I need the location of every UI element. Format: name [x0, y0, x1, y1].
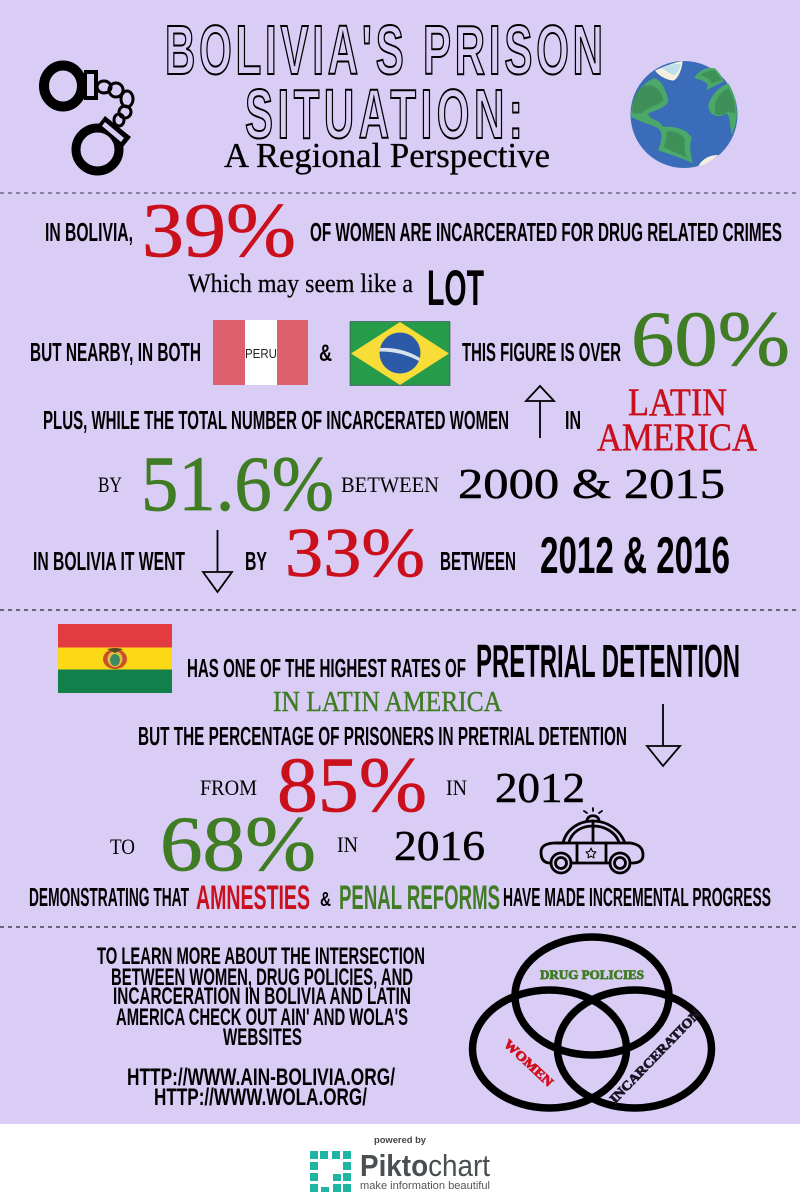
text: has one of: HAS ONE OF THE HIGHEST RATES OF — [187, 653, 466, 683]
text: 2016: 2016 — [394, 824, 485, 870]
icon: handcuffs — [44, 66, 133, 171]
arrow: up — [526, 386, 554, 438]
text: in Bolivia: IN BOLIVIA, — [45, 217, 133, 247]
text: demonstrating that: DEMONSTRATING THAT — [29, 882, 189, 912]
text block: links — [127, 1064, 395, 1111]
title: SITUATION: — [245, 76, 523, 154]
text: Latin America: AMERICA — [597, 416, 757, 459]
text block: learn more: AMERICA CHECK OUT AIN' AND WOLA'S — [116, 1004, 408, 1031]
logo: piktochart wordmark: Piktochart — [360, 1148, 490, 1183]
text: in Bolivia it went: IN BOLIVIA IT WENT — [33, 546, 185, 576]
icon: police car — [541, 808, 643, 873]
text: by: BY — [245, 546, 267, 576]
subtitle: A Regional Perspective — [224, 136, 550, 175]
number: 51.6%: 51.6% — [141, 440, 334, 527]
flag: Bolivia — [58, 624, 172, 693]
title — [165, 12, 603, 154]
text block: learn more: BETWEEN WOMEN, DRUG POLICIES, AND — [111, 964, 413, 991]
arrow: down — [203, 530, 232, 592]
text: penal reforms: PENAL REFORMS — [339, 879, 500, 917]
label: women: WOMEN — [501, 1036, 557, 1090]
text: this figure: THIS FIGURE IS OVER — [462, 337, 621, 367]
title: BOLIVIA'S PRISON — [165, 12, 603, 90]
logo: piktochart mark — [310, 1151, 351, 1192]
text: in: IN — [565, 405, 581, 435]
text: Latin America — [597, 381, 757, 459]
number: 60%: 60% — [631, 295, 790, 382]
text: which may seem: Which may seem like a — [188, 269, 413, 298]
footer text: tagline: make information beautiful — [360, 1180, 490, 1192]
text block: links: HTTP://WWW.WOLA.ORG/ — [154, 1084, 367, 1111]
text: in Latin America: IN LATIN AMERICA — [273, 687, 503, 718]
text: LOT: LOT — [427, 260, 484, 316]
text: in: IN — [337, 832, 358, 857]
text: in: IN — [446, 775, 467, 800]
text: by: BY — [98, 472, 122, 497]
number: 85%: 85% — [277, 741, 427, 828]
flag: Peru: PERU — [245, 346, 277, 361]
flag: Peru — [213, 320, 308, 385]
text: ampersand: & — [320, 889, 331, 911]
text: amnesties: AMNESTIES — [196, 879, 310, 917]
flag: Brazil — [350, 322, 450, 386]
footer text: powered by: powered by — [374, 1135, 427, 1146]
text: between: BETWEEN — [341, 472, 439, 497]
text block: learn more: WEBSITES — [223, 1024, 302, 1051]
text block: links: HTTP://WWW.AIN-BOLIVIA.ORG/ — [127, 1064, 395, 1091]
text: 2000 and 2015: 2000 & 2015 — [458, 462, 725, 508]
text block: learn more — [97, 943, 425, 1051]
venn diagram — [472, 937, 712, 1108]
text: to: TO — [110, 834, 135, 859]
text: 2012: 2012 — [495, 766, 585, 812]
label: incarceration: INCARCERATION — [606, 1006, 704, 1106]
text: ampersand: & — [319, 340, 332, 367]
icon: globe — [630, 61, 738, 168]
arrow: down — [647, 704, 680, 766]
text: from: FROM — [200, 775, 257, 800]
footer — [0, 1124, 800, 1204]
text: Latin America: LATIN — [628, 381, 727, 424]
number: 39%: 39% — [142, 187, 296, 273]
label: drug policies: DRUG POLICIES — [540, 967, 644, 982]
number: 33%: 33% — [285, 515, 425, 592]
text block: learn more: TO LEARN MORE ABOUT THE INTERSECTION — [97, 943, 425, 970]
text: between: BETWEEN — [440, 546, 516, 576]
text: but nearby: BUT NEARBY, IN BOTH — [30, 337, 201, 367]
text block: learn more: INCARCERATION IN BOLIVIA AND LATIN — [113, 983, 411, 1010]
number: 68%: 68% — [160, 800, 316, 887]
